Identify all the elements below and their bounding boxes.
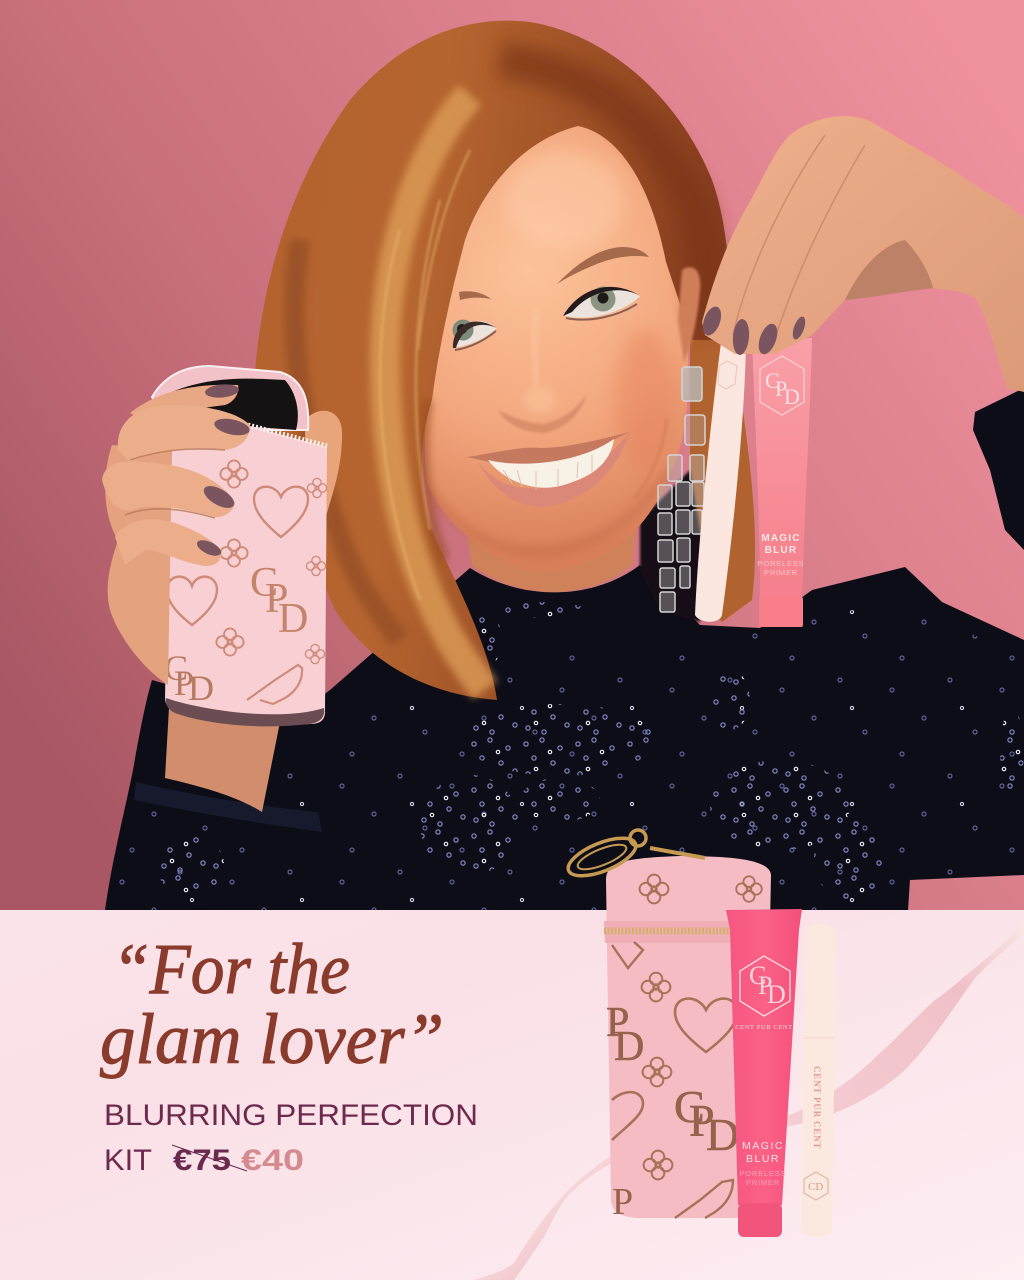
monogram left: P bbox=[606, 1000, 629, 1046]
third finger bbox=[102, 461, 235, 517]
hexagon logo bbox=[740, 956, 790, 1016]
monogram middle: C bbox=[674, 1081, 705, 1132]
left hand bbox=[102, 383, 251, 685]
pink studio backdrop bbox=[0, 0, 1024, 910]
hair main mass bbox=[255, 21, 733, 700]
first finger bbox=[130, 385, 238, 425]
nose bbox=[498, 310, 587, 433]
sleeve cuff bbox=[134, 782, 322, 832]
strike line bbox=[172, 1145, 247, 1171]
brand: CENT PUR CENT bbox=[735, 1024, 793, 1031]
jaw shadow bbox=[430, 470, 670, 551]
teeth bbox=[488, 439, 614, 488]
cream pen held in hand bbox=[695, 335, 746, 622]
name line one: MAGIC bbox=[742, 1140, 784, 1152]
upper lip bbox=[467, 432, 630, 468]
monogram left: D bbox=[614, 1024, 644, 1070]
right sleeve bbox=[973, 388, 1024, 550]
pink tube held in hand bbox=[752, 338, 812, 627]
face-side dark edge bbox=[424, 400, 445, 560]
zipper teeth gold bbox=[604, 928, 730, 934]
tube hexagon logo bbox=[760, 356, 804, 415]
case monogram: P bbox=[265, 576, 288, 622]
sparse sequins bbox=[105, 600, 1024, 910]
finger creases bbox=[733, 135, 865, 345]
ribbon right bbox=[784, 920, 1024, 1127]
seam bbox=[804, 1037, 835, 1039]
zipper teeth bbox=[248, 425, 327, 446]
monogram: C bbox=[749, 961, 766, 990]
first line: “For the bbox=[112, 929, 350, 1009]
heart right bbox=[675, 999, 737, 1052]
dark backing behind earring bbox=[640, 470, 705, 622]
quote heading bbox=[100, 929, 444, 1079]
small hexagon logo bbox=[804, 1172, 828, 1200]
lipstick motif top bbox=[612, 942, 643, 968]
eyes and brows bbox=[452, 247, 649, 350]
left hand thumb bbox=[305, 411, 342, 530]
right lash line bbox=[563, 287, 642, 316]
face bbox=[425, 126, 688, 571]
open zipper flap bbox=[152, 366, 308, 430]
tube descriptor: PORELESS bbox=[758, 559, 804, 568]
kit label: KIT bbox=[104, 1144, 152, 1177]
golden strand bbox=[385, 95, 485, 690]
price row bbox=[104, 1144, 304, 1177]
monogram low: P bbox=[612, 1181, 633, 1223]
under palm shadow bbox=[845, 240, 933, 300]
tube monogram: P bbox=[775, 376, 787, 401]
case monogram: C bbox=[250, 560, 278, 606]
cream concealer pen bbox=[801, 924, 836, 1236]
pen logo bbox=[718, 361, 737, 389]
second line: glam lover” bbox=[100, 999, 444, 1079]
heart left bbox=[612, 1092, 643, 1140]
case base bbox=[166, 698, 324, 726]
right lower lash bbox=[566, 304, 637, 320]
sequin clusters bbox=[156, 602, 1024, 900]
finger creases bbox=[125, 449, 225, 518]
name line two: BLUR bbox=[746, 1153, 780, 1165]
monogram: D bbox=[767, 980, 786, 1009]
ribbon left bbox=[473, 1155, 612, 1280]
case monogram bbox=[250, 560, 308, 642]
tube name line two: BLUR bbox=[765, 545, 797, 556]
tube monogram bbox=[765, 368, 800, 409]
nails bbox=[699, 304, 808, 357]
outer dark strand bbox=[294, 240, 400, 640]
right eye bbox=[565, 289, 640, 318]
nails bbox=[195, 383, 251, 559]
new price: €40 bbox=[241, 1144, 304, 1177]
key ring bbox=[563, 830, 705, 883]
pink primer tube bbox=[726, 909, 802, 1237]
descriptor line one: PORELESS bbox=[740, 1169, 786, 1178]
right brow bbox=[557, 247, 649, 284]
left lash line bbox=[453, 321, 497, 348]
left brow bbox=[459, 291, 491, 300]
monogram: P bbox=[758, 971, 772, 1000]
case monogram lower: C bbox=[164, 648, 188, 688]
tooth gaps bbox=[503, 455, 592, 490]
tube cap bbox=[759, 597, 803, 627]
old price: €75 bbox=[173, 1144, 231, 1177]
small monogram: CD bbox=[808, 1181, 823, 1193]
crown shadow bbox=[500, 60, 712, 330]
smile crease bbox=[634, 418, 667, 498]
forehead light bbox=[505, 150, 625, 250]
case monogram lower: P bbox=[174, 663, 194, 703]
dress with sequins bbox=[105, 565, 1024, 910]
descriptor line two: PRIMER bbox=[746, 1178, 780, 1187]
case lipstick motif bbox=[247, 665, 302, 704]
tube monogram: C bbox=[765, 368, 780, 393]
bottom panel bbox=[0, 910, 1024, 1280]
case monogram lower bbox=[164, 648, 214, 708]
vertical brand: CENT PUR CENT bbox=[812, 1066, 822, 1149]
flowers bbox=[640, 875, 762, 1179]
tube descriptor line two: PRIMER bbox=[764, 568, 798, 577]
left lower lash bbox=[455, 331, 496, 350]
case monogram: D bbox=[278, 596, 308, 642]
tube monogram: D bbox=[784, 384, 800, 409]
case monogram lower: D bbox=[188, 668, 214, 708]
case heart small bbox=[167, 577, 217, 625]
left eye bbox=[453, 321, 497, 348]
second finger bbox=[118, 405, 250, 462]
monogram left bbox=[606, 1000, 644, 1070]
crystal earring bbox=[658, 367, 705, 612]
monogram middle: P bbox=[689, 1095, 715, 1146]
zipper band bbox=[604, 921, 730, 943]
left forearm bbox=[165, 690, 280, 812]
monogram bbox=[749, 961, 786, 1009]
lipstick motif bbox=[675, 1180, 733, 1218]
zipped cosmetic case held in hand bbox=[164, 426, 327, 726]
cheek warmth bbox=[615, 330, 675, 470]
lower lip bbox=[478, 432, 630, 507]
product case bbox=[604, 856, 771, 1223]
product title: BLURRING PERFECTION bbox=[104, 1099, 478, 1132]
fourth finger bbox=[115, 519, 222, 566]
tube name: MAGIC bbox=[761, 533, 801, 544]
hair behind right side bbox=[690, 300, 755, 622]
smile bbox=[467, 432, 630, 507]
ear bbox=[678, 267, 700, 362]
case flowers bbox=[216, 460, 327, 664]
right hand and arm bbox=[699, 116, 1024, 392]
monogram middle: D bbox=[706, 1109, 739, 1160]
palm bbox=[105, 445, 172, 685]
strand lines bbox=[380, 150, 470, 600]
neck bbox=[462, 500, 640, 592]
monogram middle bbox=[674, 1081, 739, 1160]
case heart large bbox=[254, 487, 308, 537]
